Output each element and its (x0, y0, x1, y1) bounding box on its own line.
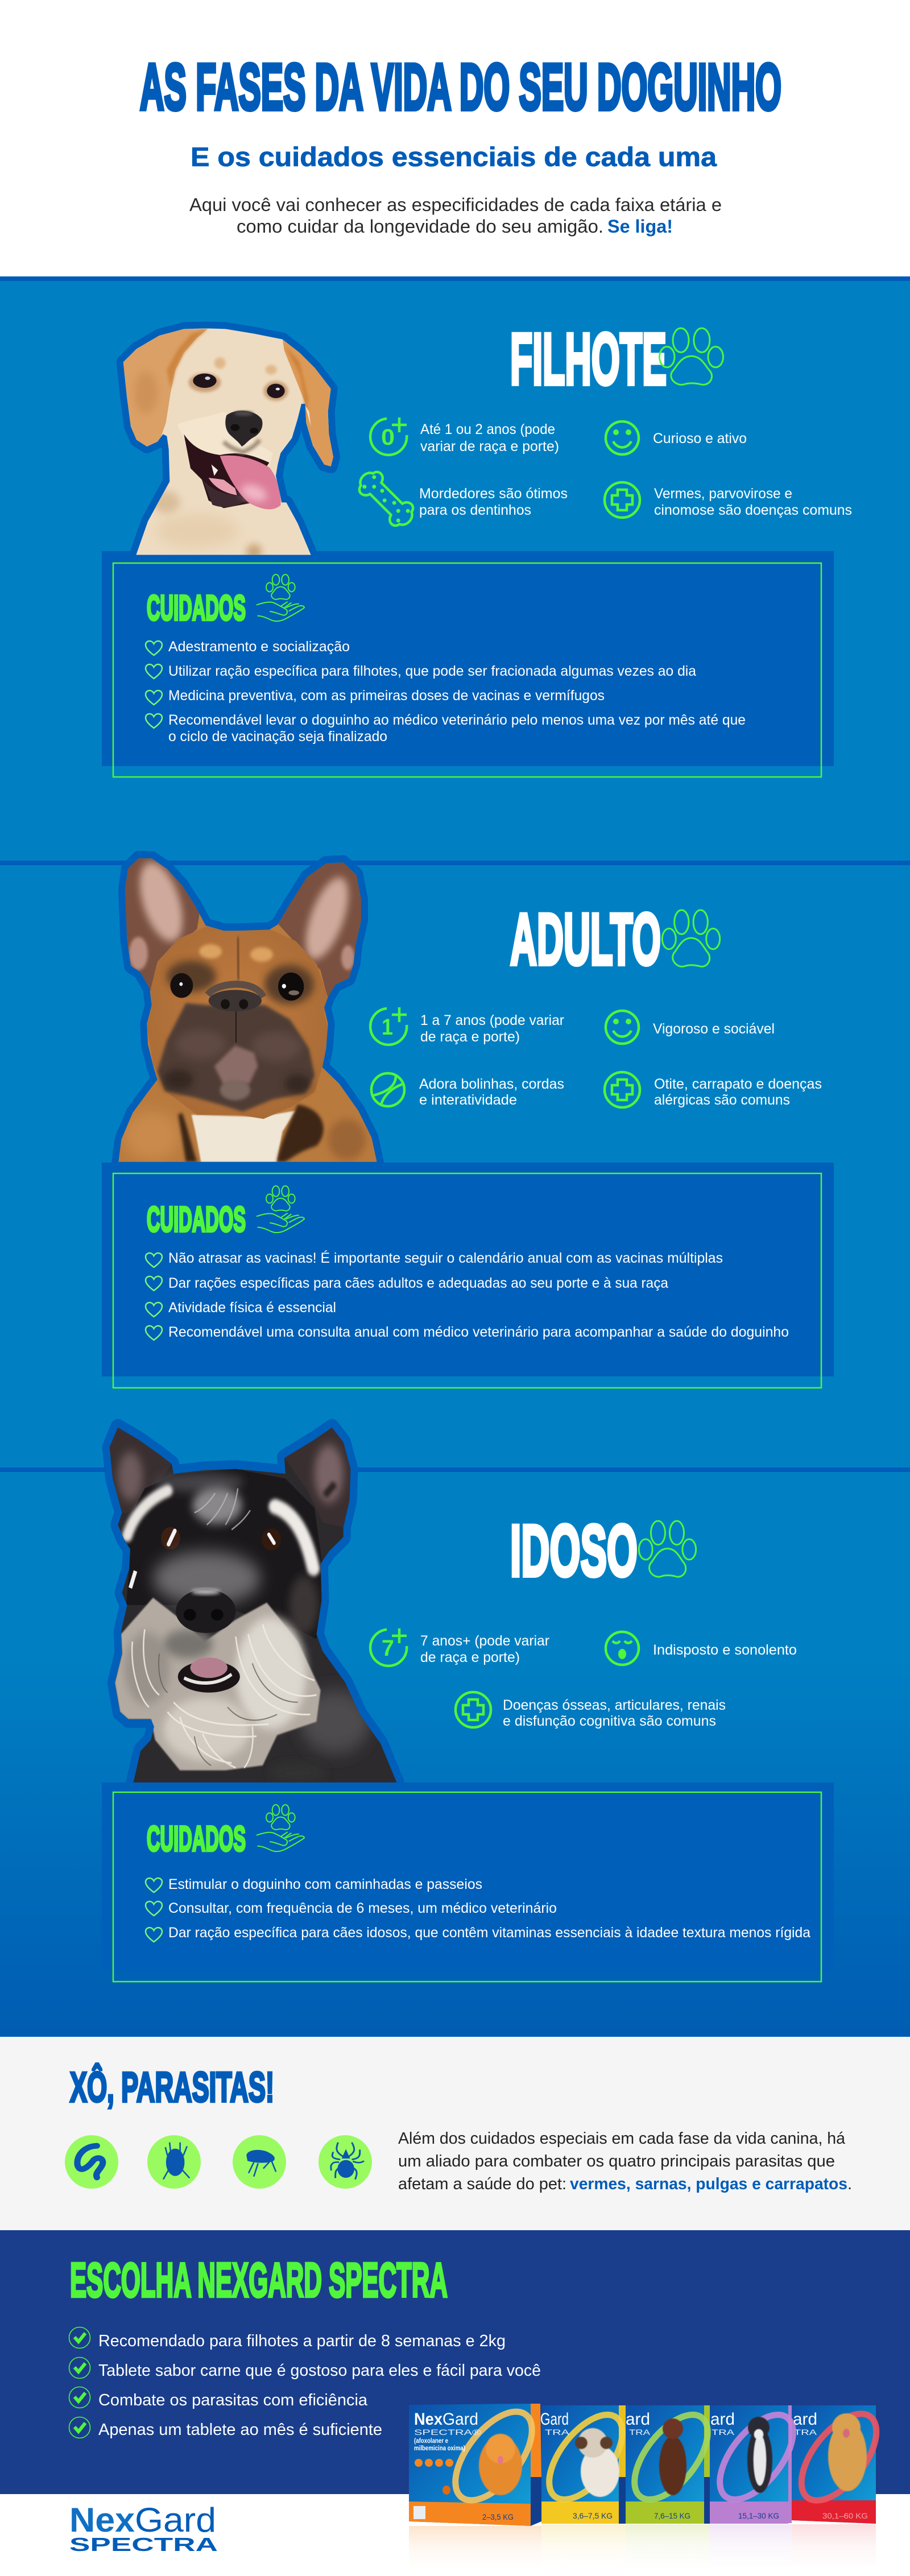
text: age: Até 1 ou 2 anos (pode (420, 421, 555, 437)
photo: french bulldog (114, 854, 383, 1164)
trait: age (370, 1007, 564, 1045)
text: parasites description: afetam a saúde do pet: (398, 2175, 566, 2193)
list: cuidados filhote: Recomendável levar o doguinho ao médico veterinário pelo menos uma vez por mês até que (168, 712, 746, 728)
trait: play (371, 1073, 564, 1108)
text: parasites description: um aliado para combater os quatro principais parasitas que (398, 2152, 835, 2170)
text: play: Adora bolinhas, cordas (419, 1076, 564, 1092)
text: diseases: Otite, carrapato e doenças (654, 1076, 822, 1092)
text: temperament: Indisposto e sonolento (653, 1642, 797, 1658)
icon: tick (318, 2135, 372, 2189)
text: diseases: Vermes, parvovirose e (654, 486, 792, 502)
box: small red: 30,1–60 KG (822, 2511, 868, 2520)
list: benefits: Tablete sabor carne que é gostoso para eles e fácil para você (98, 2362, 541, 2380)
icon: health cross (605, 1072, 640, 1107)
box: purple: ard (710, 2410, 735, 2429)
trait: teething (353, 466, 568, 532)
text: teething: Mordedores são ótimos (419, 486, 568, 502)
box: green: 7,6–15 KG (654, 2511, 690, 2520)
text: age: 1 a 7 anos (pode variar (420, 1012, 564, 1028)
logo: nexgard spectra: Nex (69, 2501, 135, 2539)
list: cuidados filhote: Adestramento e socialização (168, 639, 350, 655)
list: cuidados adulto: Dar rações específicas para cães adultos e adequadas ao seu porte e à sua raça (168, 1275, 668, 1291)
box: orange: Nex (414, 2410, 442, 2429)
box: green: TRA (629, 2428, 651, 2437)
heading: escolha nexgard spectra: ESCOLHA NEXGARD SPECTRA (70, 2254, 448, 2308)
intro text: Aqui você vai conhecer as especificidades de cada faixa etária e (189, 195, 722, 215)
icon: sleepy face (606, 1632, 639, 1665)
logo: nexgard spectra: SPECTRA (69, 2534, 218, 2555)
box: orange: 2–3,5 KG (482, 2512, 514, 2521)
icon: paw in hand (257, 574, 304, 621)
list: cuidados filhote: Utilizar ração específica para filhotes, que pode ser fracionada algumas vezes ao dia (168, 663, 696, 679)
trait: age (370, 1628, 549, 1666)
trait: diseases (456, 1692, 726, 1729)
panel: escolha nexgard spectra (0, 2230, 910, 2494)
text: age: variar de raça e porte) (420, 439, 559, 454)
panel: filhote (102, 319, 852, 777)
text: diseases (503, 1697, 726, 1729)
text: age (420, 1633, 549, 1665)
icon: paw (659, 328, 723, 384)
trait: diseases (605, 1072, 822, 1108)
list: cuidados adulto: Não atrasar as vacinas! É importante seguir o calendário anual com as vacinas múltiplas (168, 1250, 723, 1266)
icon: paw in hand (257, 1186, 304, 1233)
heading: xô, parasitas: XÔ, PARASITAS! (70, 2064, 274, 2111)
box: orange: SPECTRA® (414, 2428, 482, 2437)
panel: idoso (102, 1423, 834, 1982)
text: age: de raça e porte) (420, 1649, 520, 1665)
frame (113, 1173, 821, 1388)
logo: nexgard spectra (69, 2501, 218, 2555)
icon: 0+: 0 (381, 425, 395, 450)
intro text: como cuidar da longevidade do seu amigão. (237, 216, 603, 237)
photo: puppy (121, 326, 340, 559)
icons: parasites (65, 2135, 372, 2189)
box: purple: 15,1–30 KG (738, 2511, 779, 2520)
list: cuidados idoso (146, 1876, 810, 1942)
text: play (419, 1076, 564, 1108)
text: age (420, 421, 559, 454)
text: temperament: Curioso e ativo (653, 431, 747, 446)
heading: cuidados: CUIDADOS (147, 1820, 246, 1859)
text: parasites description (398, 2130, 852, 2193)
icon: 1+: 1 (382, 1015, 393, 1040)
list: benefits: Recomendado para filhotes a partir de 8 semanas e 2kg (98, 2332, 506, 2350)
text: diseases: cinomose são doenças comuns (654, 502, 852, 518)
icon: flea (233, 2135, 286, 2189)
list: cuidados idoso: Consultar, com frequência de 6 meses, um médico veterinário (168, 1900, 557, 1916)
text: parasites description: Além dos cuidados especiais em cada fase da vida canina, há (398, 2130, 846, 2148)
icon: 0+ (370, 417, 407, 455)
panel: cuidados filhote (113, 563, 821, 777)
heading: adulto: ADULTO (510, 899, 661, 981)
list: cuidados idoso: Dar ração específica para cães idosos, que contêm vitaminas essenciais à idadee textura menos rígida (168, 1925, 810, 1941)
icon: 7+: 7 (382, 1636, 394, 1661)
frame (113, 563, 821, 777)
heading: cuidados: CUIDADOS (147, 1200, 246, 1239)
text: age: de raça e porte) (420, 1029, 520, 1045)
icon: paw (639, 1521, 696, 1577)
header (140, 51, 781, 237)
list: cuidados adulto: Recomendável uma consulta anual com médico veterinário para acompanhar a saúde do doguinho (168, 1324, 789, 1340)
text: play: e interatividade (419, 1092, 517, 1108)
icon: ball (371, 1073, 404, 1106)
list: cuidados adulto (146, 1250, 789, 1340)
list: benefits: Combate os parasitas com eficiência (98, 2391, 368, 2409)
list: cuidados adulto: Atividade física é essencial (168, 1300, 336, 1316)
list: cuidados filhote: o ciclo de vacinação seja finalizado (168, 729, 387, 745)
subtitle: E os cuidados essenciais de cada uma (191, 142, 717, 172)
icon: health cross (456, 1692, 491, 1727)
box: green: ard (626, 2410, 650, 2429)
box: purple (706, 2403, 807, 2524)
box: yellow: 3,6–7,5 KG (573, 2511, 613, 2520)
trait: temperament (606, 421, 747, 454)
box: purple: TRA (712, 2428, 735, 2437)
text: teething: para os dentinhos (419, 502, 531, 518)
list: cuidados filhote: Medicina preventiva, com as primeiras doses de vacinas e vermífugos (168, 688, 605, 704)
trait: temperament (606, 1011, 775, 1044)
panel: cuidados adulto background (102, 1163, 834, 1376)
heading: filhote: FILHOTE (510, 319, 667, 400)
text: diseases (654, 1076, 822, 1108)
box: small red (787, 2401, 891, 2524)
intro text (189, 195, 722, 237)
box: small red: ard (793, 2410, 817, 2429)
product: nexgard boxes (398, 2399, 891, 2570)
box: orange: Gard (442, 2410, 478, 2429)
icon: paw (662, 910, 720, 966)
text: diseases: Doenças ósseas, articulares, renais (503, 1697, 726, 1713)
heading: idoso: IDOSO (510, 1511, 638, 1591)
logo: nexgard spectra: Gard (135, 2501, 216, 2539)
trait: age (370, 417, 559, 455)
trait: diseases (605, 482, 852, 518)
blue background panel (0, 276, 910, 2037)
panel: cuidados idoso (113, 1792, 821, 1982)
panel: cuidados filhote background (102, 551, 834, 766)
photo: schnauzer (104, 1423, 403, 1787)
list: benefits (69, 2327, 541, 2439)
text: teething (419, 486, 568, 518)
text: diseases: alérgicas são comuns (654, 1092, 790, 1108)
panel: cuidados adulto (113, 1173, 821, 1388)
box: yellow: Gard (540, 2410, 569, 2429)
icon: smile (606, 1011, 639, 1044)
text: parasites description: . (847, 2175, 852, 2193)
list: benefits: Apenas um tablete ao mês é suficiente (98, 2421, 382, 2439)
list: cuidados filhote (146, 639, 746, 745)
icon: paw in hand (257, 1805, 304, 1851)
panel: parasitas (0, 2037, 910, 2230)
text: age: 7 anos+ (pode variar (420, 1633, 549, 1649)
box: green (621, 2403, 722, 2524)
icon: 1+ (370, 1007, 407, 1045)
text: diseases (654, 486, 852, 518)
box: orange: (afoxolaner e (414, 2437, 448, 2445)
heading: cuidados: CUIDADOS (147, 589, 246, 628)
panel: cuidados idoso background (102, 1783, 834, 1971)
list: cuidados idoso: Estimular o doguinho com caminhadas e passeios (168, 1876, 482, 1892)
icon: mite (147, 2135, 201, 2189)
frame (113, 1792, 821, 1982)
reflections (398, 2523, 887, 2570)
trait: temperament (606, 1632, 797, 1665)
text: parasites description: vermes, sarnas, pulgas e carrapatos (570, 2175, 847, 2193)
icon: bone (353, 466, 419, 532)
icon: smile (606, 421, 639, 454)
box: orange (409, 2399, 547, 2526)
icon: 7+ (370, 1628, 407, 1666)
intro text: Se liga! (607, 216, 673, 237)
panel: adulto (102, 854, 834, 1388)
box: yellow (535, 2403, 636, 2524)
box: orange: milbemicina oxima) (414, 2444, 465, 2452)
icon: worm (65, 2135, 118, 2189)
box: small red: TRA (794, 2428, 817, 2437)
text: temperament: Vigoroso e sociável (653, 1021, 775, 1037)
box: yellow: TRA (545, 2428, 570, 2437)
text: diseases: e disfunção cognitiva são comuns (503, 1713, 716, 1729)
icon: health cross (605, 482, 640, 518)
text: age (420, 1012, 564, 1045)
